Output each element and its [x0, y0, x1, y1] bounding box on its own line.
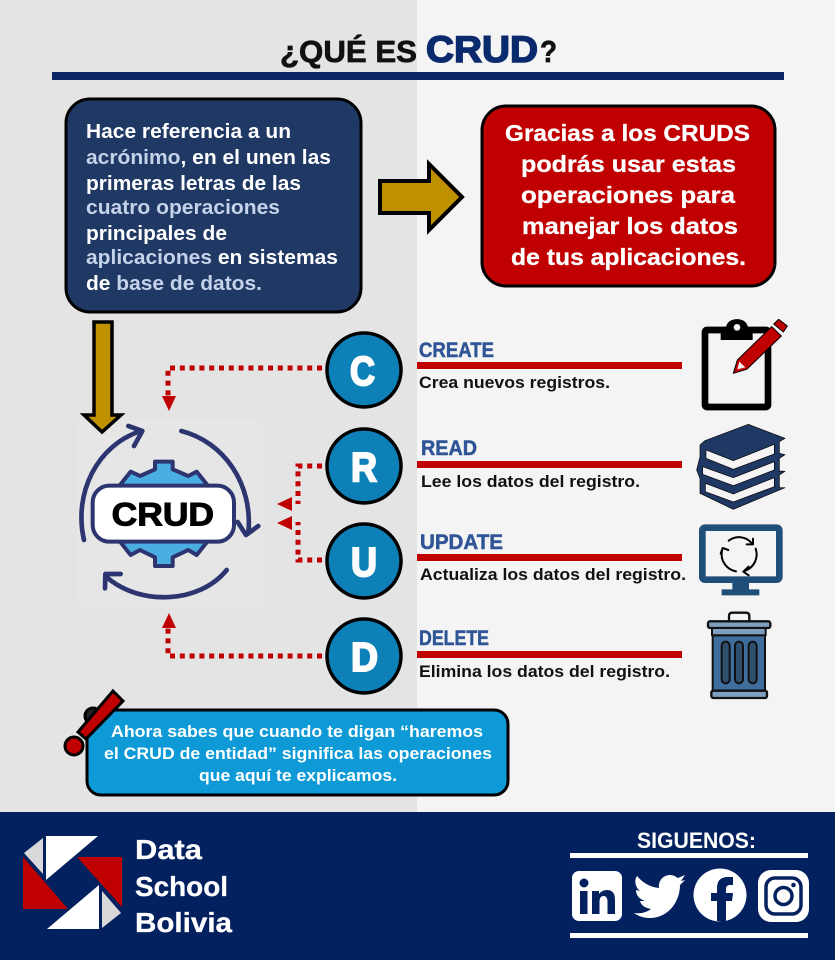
badge: C — [327, 333, 401, 407]
icon: linkedin — [572, 871, 622, 921]
row: update: Actualiza los datos del registro. — [420, 565, 686, 584]
icon: twitter — [634, 875, 685, 918]
arrow: delete connector — [162, 613, 322, 656]
badge: C: C — [350, 348, 375, 394]
panel: operations message: de tus aplicaciones. — [511, 244, 746, 270]
icon: facebook — [694, 868, 746, 922]
title: ? — [540, 34, 557, 69]
brand name: Data — [135, 834, 202, 865]
panel: definition: cuatro operaciones — [86, 197, 280, 219]
panel: definition: primeras letras de las — [86, 173, 301, 195]
title: CRUD — [426, 29, 538, 70]
row: update: UPDATE — [420, 531, 503, 554]
brand name: School — [135, 871, 228, 902]
icon: books — [697, 424, 785, 509]
logo — [23, 836, 122, 929]
row: read — [417, 437, 682, 491]
arrow: create connector — [162, 368, 322, 411]
badge: D: D — [351, 634, 378, 680]
title: ¿QUÉ ES — [280, 34, 417, 69]
panel: operations message: operaciones para — [521, 182, 736, 208]
panel: definition: aplicaciones en sistemas — [86, 247, 338, 269]
title — [280, 29, 557, 70]
arrow: read connector — [277, 466, 322, 511]
row: update — [417, 531, 686, 584]
icon: instagram — [758, 870, 809, 922]
icon: clipboard and pencil — [705, 319, 787, 407]
social heading: SIGUENOS: — [637, 828, 756, 853]
badge: R: R — [351, 444, 377, 490]
panel: definition: acrónimo, en el unen las — [86, 147, 331, 169]
callout: el CRUD de entidad” significa las operaciones — [104, 744, 492, 763]
badge: D — [327, 619, 401, 693]
panel: operations message: manejar los datos — [522, 213, 738, 239]
row: create: CREATE — [419, 339, 494, 362]
panel: definition: Hace referencia a un — [86, 121, 291, 143]
icon: monitor with refresh — [702, 528, 779, 595]
callout: que aquí te explicamos. — [199, 766, 397, 785]
panel: operations message: Gracias a los CRUDS — [505, 120, 750, 146]
footer band — [0, 812, 835, 960]
panel: operations message — [482, 106, 775, 286]
badge: R — [327, 429, 401, 503]
badge: U: U — [351, 539, 377, 585]
row: create: Crea nuevos registros. — [419, 373, 610, 392]
brand name: Bolivia — [135, 907, 232, 938]
row: delete: DELETE — [419, 627, 489, 650]
brand name — [135, 834, 232, 938]
badge: U — [327, 524, 401, 598]
icon: CRUD cycle — [77, 420, 263, 607]
panel: definition: de base de datos. — [86, 273, 262, 295]
row: create — [417, 339, 682, 392]
icon: trash can — [708, 613, 770, 698]
panel: definition — [66, 99, 361, 312]
icon: exclamation mark — [65, 691, 123, 755]
row: delete: Elimina los datos del registro. — [419, 662, 670, 681]
callout — [87, 710, 508, 795]
panel: definition: principales de — [86, 223, 227, 245]
arrow: right to red panel — [380, 164, 462, 230]
row: read: Lee los datos del registro. — [421, 472, 640, 491]
row: delete — [417, 627, 682, 681]
arrow: down to CRUD icon — [84, 322, 121, 432]
icon: CRUD cycle: CRUD — [112, 497, 214, 533]
panel: operations message: podrás usar estas — [521, 151, 736, 177]
callout: Ahora sabes que cuando te digan “haremos — [111, 722, 483, 741]
row: read: READ — [421, 437, 477, 460]
arrow: update connector — [277, 516, 322, 560]
